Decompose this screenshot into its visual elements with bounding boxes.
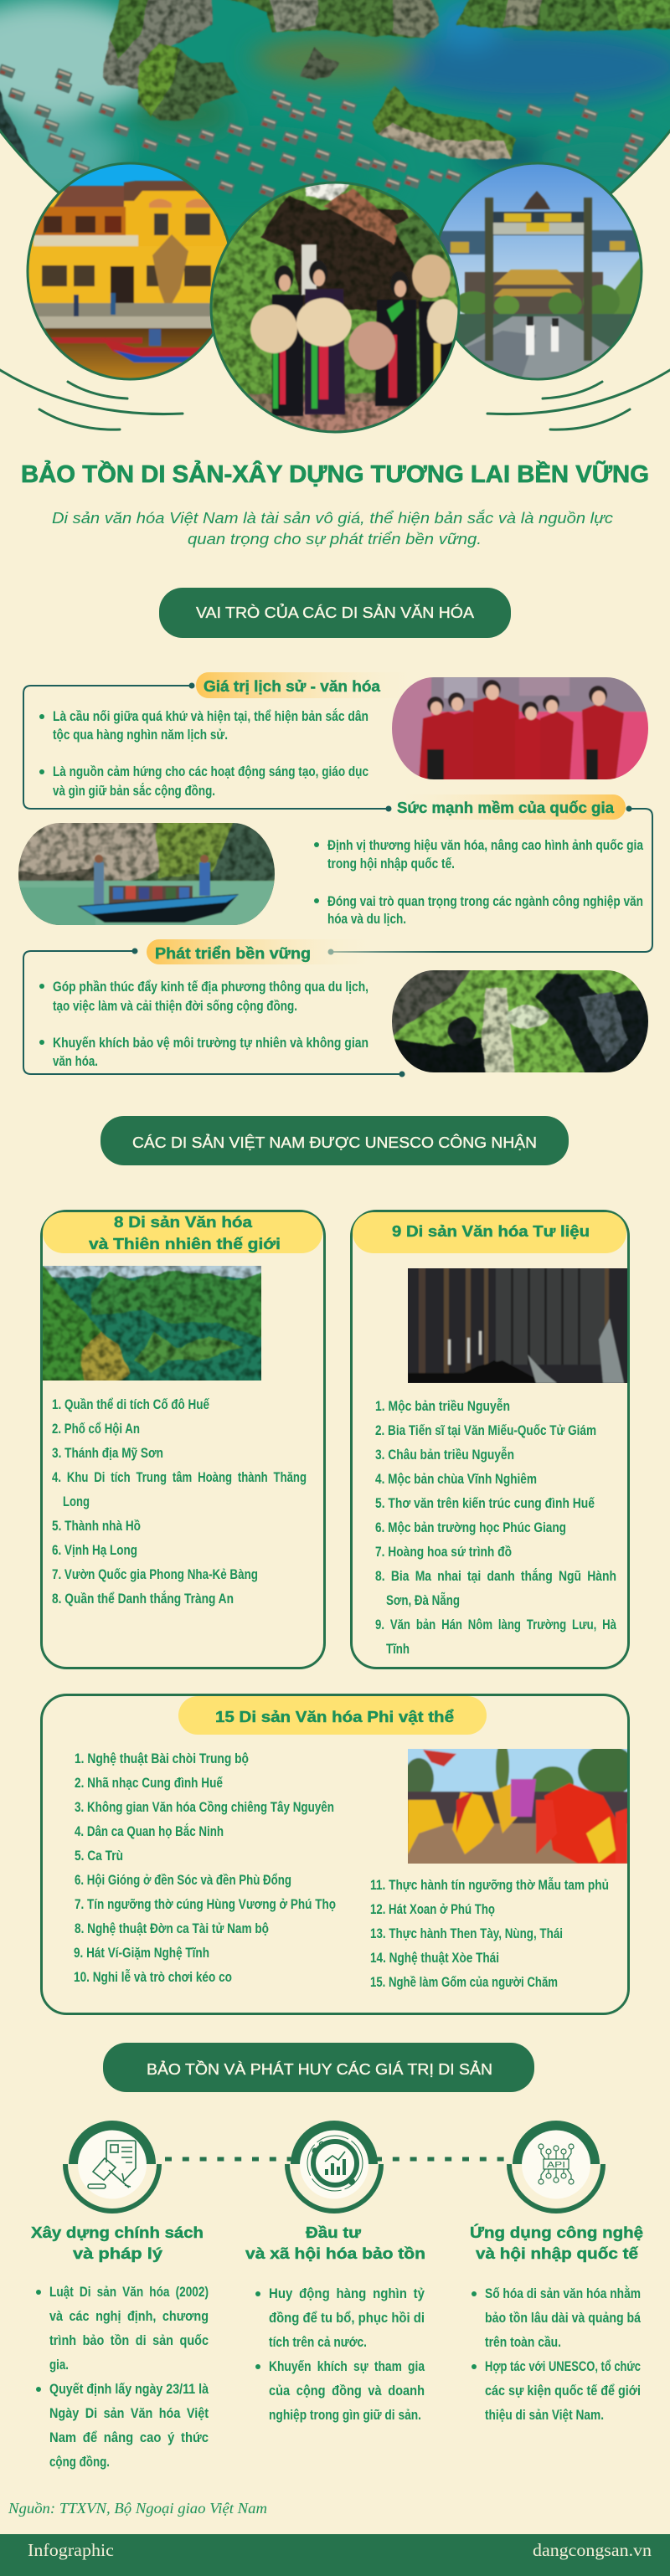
text: sustainable development bullets: tạo việc làm và cải thiện đời sống cộng đồng.	[53, 999, 297, 1014]
connector lines: role block	[23, 683, 652, 1077]
footer bar: dangcongsan.vn	[533, 2540, 652, 2560]
list: documentary heritage: 2. Bia Tiến sĩ tại Văn Miếu-Quốc Tử Giám	[375, 1423, 596, 1438]
photo: forest explorers	[392, 970, 648, 1072]
label: sustainable development	[147, 939, 381, 964]
list: documentary heritage: 9. Văn bản Hán Nôm làng Trường Lưu, Hà	[375, 1617, 617, 1632]
text: sustainable development bullets: văn hóa.	[53, 1054, 98, 1069]
photo: tug of war festival	[408, 1749, 627, 1864]
list: intangible heritage left: 8. Nghệ thuật Đờn ca Tài tử Nam bộ	[75, 1921, 269, 1936]
icon: API technology chip	[507, 2121, 606, 2214]
list: intangible heritage left: 3. Không gian Văn hóa Cồng chiêng Tây Nguyên	[75, 1800, 334, 1815]
text: technology bullets: các sự kiện quốc tế để giới	[485, 2383, 641, 2399]
list: documentary heritage: Tĩnh	[386, 1642, 410, 1657]
text: soft power bullets: trong hội nhập quốc tế.	[327, 856, 455, 872]
list: world heritage: Long	[63, 1494, 90, 1509]
text: sustainable development bullets	[39, 979, 368, 1069]
list: documentary heritage	[375, 1398, 617, 1657]
list: intangible heritage left	[74, 1751, 336, 1985]
photo: woodblocks	[408, 1268, 627, 1383]
icon: investment chart	[285, 2121, 384, 2214]
list: world heritage: 4. Khu Di tích Trung tâm Hoàng thành Thăng	[52, 1470, 307, 1485]
text: policy bullets: Nam để nâng cao ý thức	[49, 2430, 209, 2445]
photo circle: Hue imperial gate	[431, 159, 645, 385]
photo circle: Quan ho singers	[209, 181, 461, 434]
list: world heritage: 6. Vịnh Hạ Long	[52, 1543, 137, 1558]
text: technology bullets: Số hóa di sản văn hóa nhằm	[485, 2285, 641, 2301]
heading: technology	[470, 2224, 643, 2262]
text: policy bullets: gia.	[49, 2357, 69, 2373]
list: documentary heritage: 3. Châu bản triều Nguyễn	[375, 1447, 514, 1463]
section heading: preservation	[103, 2043, 534, 2092]
decorative curves: left	[0, 370, 183, 429]
list: intangible heritage left: 4. Dân ca Quan họ Bắc Ninh	[75, 1823, 224, 1839]
text: historical value bullets: Là nguồn cảm hứng cho các hoạt động sáng tạo, giáo dục	[53, 764, 368, 779]
header: 8 heritage: và Thiên nhiên thế giới	[89, 1235, 281, 1252]
list: intangible heritage right: 14. Nghệ thuật Xòe Thái	[370, 1951, 499, 1966]
panel: sustainable development	[39, 939, 655, 1080]
list: world heritage: 2. Phố cổ Hội An	[52, 1422, 140, 1437]
footer bar: Infographic	[28, 2540, 114, 2560]
text: policy bullets: Ngày Di sản Văn hóa Việt	[49, 2406, 209, 2421]
subtitle: Di sản văn hóa Việt Nam là tài sản vô giá, thể hiện bản sắc và là nguồn lực	[52, 510, 613, 527]
source note: Nguồn: TTXVN, Bộ Ngoại giao Việt Nam	[8, 2500, 267, 2517]
subtitle	[52, 510, 613, 548]
photo: boat in karst	[18, 823, 275, 925]
heading: policy	[31, 2224, 204, 2262]
icon: API technology chip: API	[547, 2161, 565, 2170]
text: investment bullets: tích trên cả nước.	[269, 2335, 367, 2350]
title: BẢO TỒN DI SẢN-XÂY DỰNG TƯƠNG LAI BỀN VỮNG	[21, 460, 649, 488]
text: investment bullets: Huy động hàng nghìn tỷ	[269, 2286, 425, 2301]
text: policy bullets: Luật Di sản Văn hóa (2002)	[49, 2285, 209, 2300]
panel: 15 intangible heritages	[42, 1694, 636, 2014]
text: sustainable development bullets: Góp phần thúc đẩy kinh tế địa phương thông qua du lịch,	[53, 979, 368, 995]
list: intangible heritage left: 5. Ca Trù	[75, 1848, 123, 1864]
label: sustainable development: Phát triển bền vững	[155, 944, 311, 962]
list: world heritage	[52, 1397, 307, 1607]
section heading: roles	[159, 588, 511, 638]
list: documentary heritage: Sơn, Đà Nẵng	[386, 1591, 460, 1608]
text: investment bullets: Khuyến khích sự tham gia	[269, 2359, 425, 2374]
text: historical value bullets: tộc qua hàng nghìn năm lịch sử.	[53, 728, 228, 743]
header: 9 documentary	[353, 1212, 626, 1253]
section heading: UNESCO: CÁC DI SẢN VIỆT NAM ĐƯỢC UNESCO CÔNG NHẬN	[132, 1134, 537, 1151]
hero: Ha Long bay photo	[0, 0, 670, 240]
text: investment bullets: đồng để tu bổ, phục hồi di	[269, 2311, 425, 2326]
heading: policy: Xây dựng chính sách	[31, 2224, 204, 2241]
panel: 8 world heritage sites	[36, 1211, 325, 1668]
decorative curves: right	[487, 370, 670, 429]
heading: investment: Đầu tư	[306, 2224, 362, 2241]
header: 9 documentary: 9 Di sản Văn hóa Tư liệu	[392, 1222, 590, 1240]
text: technology bullets: trên toàn cầu.	[485, 2335, 561, 2350]
text: policy bullets: và các nghị định, chương	[49, 2309, 209, 2324]
text: technology bullets: bảo tồn lâu dài và quảng bá	[485, 2311, 642, 2326]
heading: investment	[245, 2224, 425, 2262]
heading: policy: và pháp lý	[73, 2244, 163, 2262]
text: historical value bullets	[39, 708, 368, 799]
header: 8 heritage	[43, 1212, 322, 1253]
photo: singers in red	[392, 677, 648, 779]
list: intangible heritage left: 6. Hội Gióng ở đền Sóc và đền Phù Đổng	[75, 1873, 291, 1888]
header: 15 intangible	[178, 1696, 487, 1735]
list: intangible heritage right: 13. Thực hành Then Tày, Nùng, Thái	[370, 1926, 563, 1941]
list: intangible heritage right: 15. Nghề làm Gốm của người Chăm	[370, 1975, 558, 1990]
list: documentary heritage: 1. Mộc bản triều Nguyễn	[375, 1398, 510, 1414]
text: historical value bullets: và gìn giữ bản sắc cộng đồng.	[53, 783, 215, 799]
list: world heritage: 8. Quần thể Danh thắng Tràng An	[52, 1591, 234, 1607]
list: world heritage: 5. Thành nhà Hồ	[52, 1519, 141, 1534]
list: world heritage: 7. Vườn Quốc gia Phong Nha-Kẻ Bàng	[52, 1567, 258, 1582]
panel: 9 documentary heritages	[352, 1211, 633, 1668]
column: technology and international integration	[470, 2224, 643, 2423]
label: soft power: Sức mạnh mềm của quốc gia	[397, 799, 615, 816]
list: intangible heritage right	[370, 1877, 609, 1990]
heading: investment: và xã hội hóa bảo tồn	[245, 2244, 425, 2262]
footer bar	[0, 2534, 670, 2576]
list: intangible heritage left: 10. Nghi lễ và trò chơi kéo co	[74, 1969, 232, 1985]
list: world heritage: 1. Quần thể di tích Cố đô Huế	[52, 1397, 210, 1412]
text: historical value bullets: Là cầu nối giữa quá khứ và hiện tại, thể hiện bản sắc dân	[53, 708, 368, 724]
label: historical value	[196, 672, 422, 698]
list: intangible heritage right: 12. Hát Xoan ở Phú Thọ	[370, 1902, 495, 1917]
list: intangible heritage left: 1. Nghệ thuật Bài chòi Trung bộ	[75, 1751, 249, 1766]
column: policy and legal framework	[31, 2224, 209, 2470]
label: historical value: Giá trị lịch sử - văn hóa	[204, 677, 381, 695]
text: policy bullets: cộng đồng.	[49, 2455, 110, 2470]
dotted connector	[165, 2157, 504, 2162]
header: 15 intangible: 15 Di sản Văn hóa Phi vật thể	[215, 1708, 454, 1725]
text: policy bullets	[36, 2285, 209, 2470]
panel: national soft power	[12, 794, 644, 933]
list: documentary heritage: 4. Mộc bản chùa Vĩnh Nghiêm	[375, 1472, 537, 1487]
header: 8 heritage: 8 Di sản Văn hóa	[114, 1213, 253, 1231]
text: soft power bullets	[314, 838, 644, 927]
list: world heritage: 3. Thánh địa Mỹ Sơn	[52, 1446, 163, 1461]
text: investment bullets: của cộng đồng và doanh	[269, 2383, 425, 2399]
section heading: preservation: BẢO TỒN VÀ PHÁT HUY CÁC GIÁ TRỊ DI SẢN	[147, 2060, 492, 2078]
section heading: roles: VAI TRÒ CỦA CÁC DI SẢN VĂN HÓA	[196, 604, 475, 621]
text: technology bullets: thiệu di sản Việt Nam.	[485, 2408, 604, 2423]
column: investment and socialization	[245, 2224, 425, 2423]
subtitle: quan trọng cho sự phát triển bền vững.	[188, 531, 482, 548]
label: soft power	[389, 794, 626, 820]
heading: technology: Ứng dụng công nghệ	[470, 2224, 643, 2241]
panel: historical and cultural value	[39, 670, 653, 799]
list: intangible heritage left: 2. Nhã nhạc Cung đình Huế	[75, 1776, 224, 1791]
list: intangible heritage right: 11. Thực hành tín ngưỡng thờ Mẫu tam phủ	[370, 1877, 609, 1893]
heading: technology: và hội nhập quốc tế	[476, 2244, 639, 2262]
text: policy bullets: Quyết định lấy ngày 23/11 là	[49, 2382, 209, 2397]
text: technology bullets	[472, 2285, 642, 2423]
text: investment bullets: nghiệp trong gìn giữ di sản.	[269, 2408, 421, 2423]
list: documentary heritage: 8. Bia Ma nhai tại danh thắng Ngũ Hành	[375, 1568, 616, 1584]
text: investment bullets	[255, 2286, 425, 2423]
list: documentary heritage: 6. Mộc bản trường học Phúc Giang	[375, 1520, 566, 1535]
list: documentary heritage: 7. Hoàng hoa sứ trình đồ	[375, 1545, 512, 1560]
text: soft power bullets: hóa và du lịch.	[327, 912, 406, 927]
section heading: UNESCO	[100, 1116, 569, 1165]
list: intangible heritage left: 7. Tín ngưỡng thờ cúng Hùng Vương ở Phú Thọ	[75, 1897, 336, 1912]
photo: Trang An	[43, 1266, 261, 1381]
list: intangible heritage left: 9. Hát Ví-Giặm Nghệ Tĩnh	[74, 1946, 209, 1961]
photo circle: Hoi An	[25, 159, 236, 388]
text: policy bullets: trình bảo tồn di sản quốc	[49, 2333, 209, 2348]
icon: law document and gavel	[63, 2121, 162, 2214]
list: documentary heritage: 5. Thơ văn trên kiến trúc cung đình Huế	[375, 1496, 595, 1511]
text: sustainable development bullets: Khuyến khích bảo vệ môi trường tự nhiên và không gian	[53, 1036, 368, 1051]
